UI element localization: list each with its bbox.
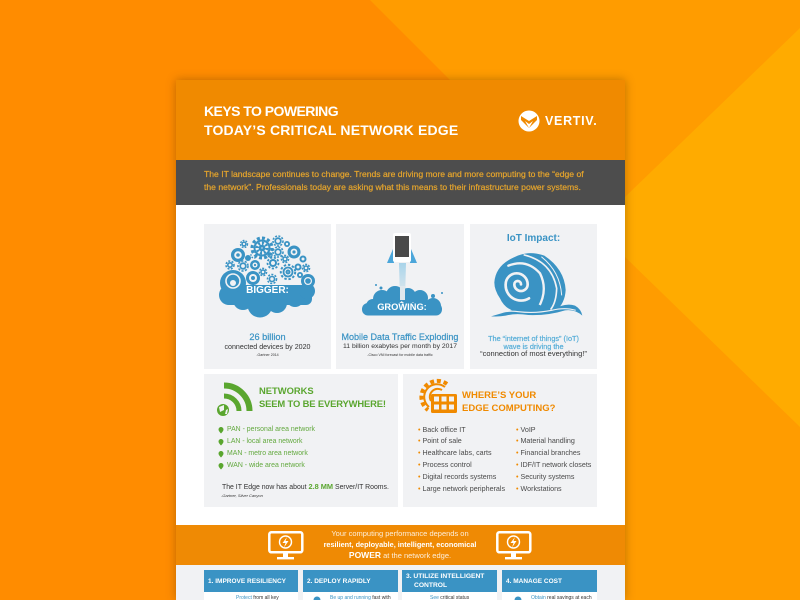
network list [218,426,315,470]
edge heading: WHERE’S YOUR [462,390,536,401]
stat: 26 billion: 26 billion [249,332,286,342]
cloud label: BIGGER: [246,285,289,296]
stat: mobile data: Mobile Data Traffic Exploding [342,332,458,342]
panel: bigger [204,224,331,369]
card heading [502,570,597,592]
logo: Vertiv: VERTIV. [545,114,597,128]
icon: location pins [218,427,224,470]
network list: WAN - wide area network [227,462,305,469]
card heading: 2. DEPLOY RAPIDLY [307,578,371,585]
power message [324,529,476,560]
icon: phone rocket on cloud [362,233,443,316]
power band [176,525,625,565]
icon: spiral wave [491,253,582,316]
intro text: the network”. Professionals today are asking what this means to their infrastructure power systems. [204,182,581,192]
card 2: deploy rapidly [303,570,398,600]
card heading: 4. MANAGE COST [506,578,562,585]
card heading: 3. UTILIZE INTELLIGENT [406,573,484,580]
stat caption: connected devices by 2020 [224,343,310,351]
panel: IoT impact [470,224,597,369]
title: TODAY’S CRITICAL NETWORK EDGE [204,122,458,138]
edge list right [516,426,592,493]
edge list left: • Process control [418,461,472,469]
card icon [514,596,522,600]
document sheet [176,80,625,600]
edge heading: EDGE COMPUTING? [462,403,555,414]
panel: growing [336,224,464,369]
source: -Gartner, Silver Canyon [221,493,263,498]
card heading [402,570,497,592]
panel: networks [204,374,398,507]
card 1: improve resiliency [204,570,298,600]
edge list right: • IDF/IT network closets [516,461,591,469]
networks heading: SEEM TO BE EVERYWHERE! [259,398,386,409]
edge list left [418,426,505,493]
intro band [176,160,625,205]
icon: monitor right [496,531,532,560]
icon: sun and grid [419,378,457,413]
edge list left: • Healthcare labs, carts [418,449,492,457]
power message: Your computing performance depends on [331,529,469,538]
icon: monitor left [268,531,304,560]
edge list left: • Large network peripherals [418,485,505,493]
stat caption: 11 billion exabytes per month by 2017 [343,343,457,350]
intro text: The IT landscape continues to change. Trends are driving more and more computing to the “edge of [204,169,584,179]
card heading [303,570,398,592]
card heading [204,570,298,592]
edge list left: • Point of sale [418,437,462,445]
lower section background [176,565,625,600]
power message: resilient, deployable, intelligent, economical [324,540,476,549]
cloud label: GROWING: [377,302,427,312]
card 4: manage cost [502,570,597,600]
network list: MAN - metro area network [227,450,308,457]
IoT heading: IoT Impact: [507,233,560,244]
network list: PAN - personal area network [227,426,315,433]
card icon [314,596,320,600]
source: -Cisco VNI forecast for mobile data traffic [367,353,433,357]
edge list right: • Workstations [516,485,562,493]
card heading: 1. IMPROVE RESILIENCY [208,578,286,585]
icon: wifi globe [217,382,252,416]
IoT caption [480,334,587,358]
edge list right: • Security systems [516,473,574,481]
edge list right: • Material handling [516,437,575,445]
networks heading [259,385,386,409]
edge list left: • Digital records systems [418,473,496,481]
server room stat: The IT Edge now has about 2.8 MM Server/IT Rooms. [222,482,389,491]
logo: Vertiv [518,110,597,132]
icon: gears over cloud [219,235,315,318]
edge list left: • Back office IT [418,426,466,434]
source: -Gartner 2014 [256,353,279,357]
IoT caption: wave is driving the [503,342,564,351]
panel: edge computing [403,374,597,507]
network list: LAN - local area network [227,438,302,445]
title [204,103,458,138]
card 3: utilize intelligent control [402,570,497,600]
IoT caption: “connection of most everything!” [480,349,587,358]
IoT caption: The “internet of things” (IoT) [488,334,579,343]
intro text [204,169,584,192]
card heading: CONTROL [414,582,447,589]
title: KEYS TO POWERING [204,103,338,119]
edge list right: • Financial branches [516,449,580,457]
header band [176,80,625,160]
edge list right: • VoIP [516,426,536,434]
power message: POWER at the network edge. [349,550,451,560]
edge heading [462,390,555,414]
networks heading: NETWORKS [259,385,314,396]
